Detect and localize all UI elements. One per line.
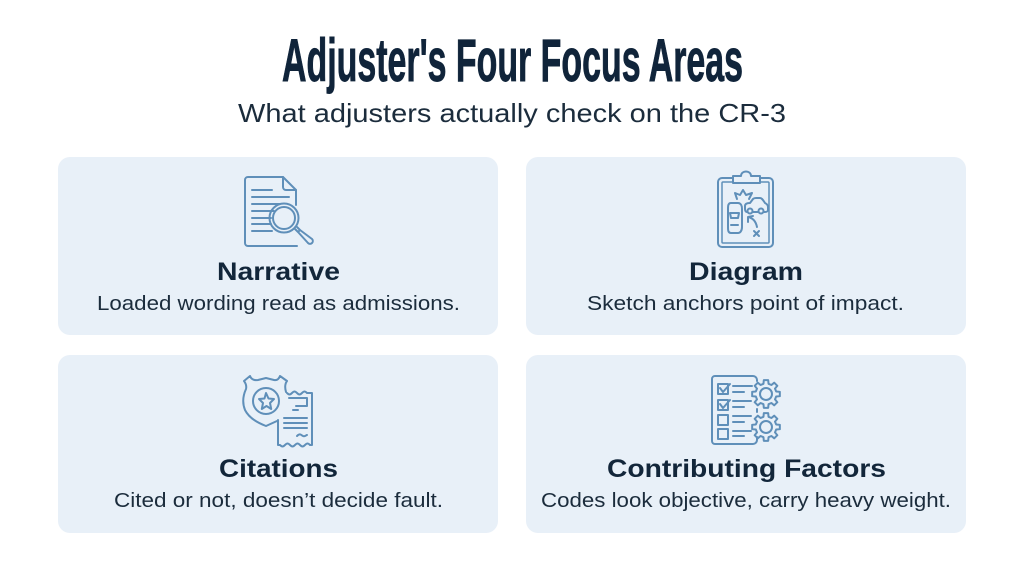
heading: contributing factors: Contributing Factors: [607, 455, 886, 483]
icon: document with magnifying glass: [245, 177, 313, 246]
icon: clipboard with crash sketch: [718, 172, 773, 247]
text: diagram description: Sketch anchors point of impact.: [587, 293, 904, 315]
heading: narrative: Narrative: [217, 258, 340, 286]
panel: contributing factors: [526, 355, 966, 533]
panel: diagram: [526, 157, 966, 335]
heading: citations: Citations: [219, 455, 338, 483]
panel: citations: [58, 355, 498, 533]
panel: narrative: [58, 157, 498, 335]
text: contributing factors description: Codes look objective, carry heavy weight.: [541, 490, 951, 512]
text: narrative description: Loaded wording read as admissions.: [97, 293, 460, 315]
subtitle: What adjusters actually check on the CR-3: [238, 98, 786, 128]
text: citations description: Cited or not, doesn’t decide fault.: [114, 490, 443, 512]
icon: police badge with citation: [243, 376, 312, 446]
icon: checklist with gears: [712, 376, 780, 444]
heading: diagram: Diagram: [689, 258, 803, 286]
